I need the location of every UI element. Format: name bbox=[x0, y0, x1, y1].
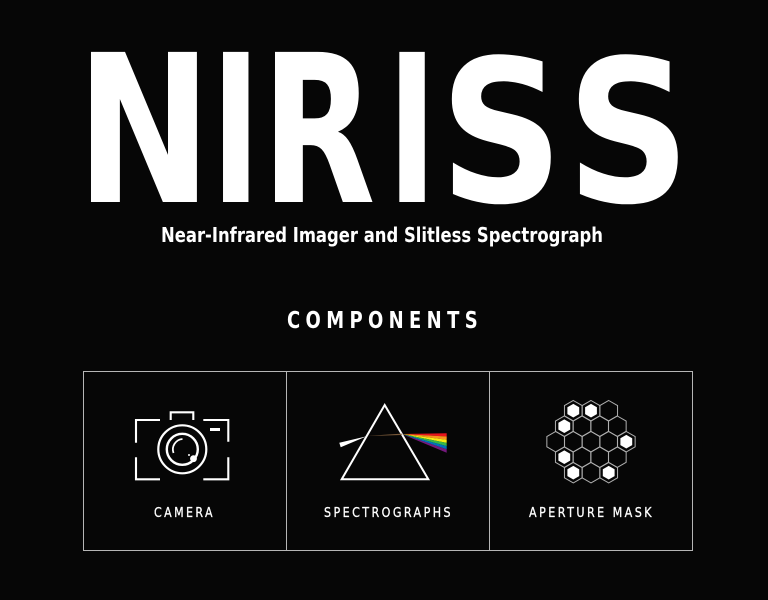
icon: hexagonal aperture mask bbox=[547, 400, 635, 483]
panel: camera bbox=[84, 372, 286, 550]
label: aperture mask: APERTURE MASK bbox=[529, 505, 654, 521]
panel: components grid bbox=[84, 372, 692, 550]
title: I bbox=[211, 12, 261, 252]
title: N bbox=[76, 11, 212, 251]
title bbox=[76, 11, 690, 252]
label: spectrographs: SPECTROGRAPHS bbox=[324, 505, 453, 521]
panel: aperture mask bbox=[490, 372, 692, 550]
icon: prism with rainbow bbox=[339, 405, 447, 479]
title: I bbox=[387, 12, 437, 252]
subtitle: Near-Infrared Imager and Slitless Spectrograph bbox=[161, 223, 603, 247]
panel: spectrographs bbox=[286, 372, 490, 550]
title: S bbox=[440, 18, 563, 249]
title: R bbox=[261, 11, 375, 251]
title: S bbox=[566, 18, 690, 249]
label: camera: CAMERA bbox=[154, 505, 215, 521]
heading: components: COMPONENTS bbox=[287, 306, 483, 334]
icon: camera bbox=[136, 412, 228, 479]
